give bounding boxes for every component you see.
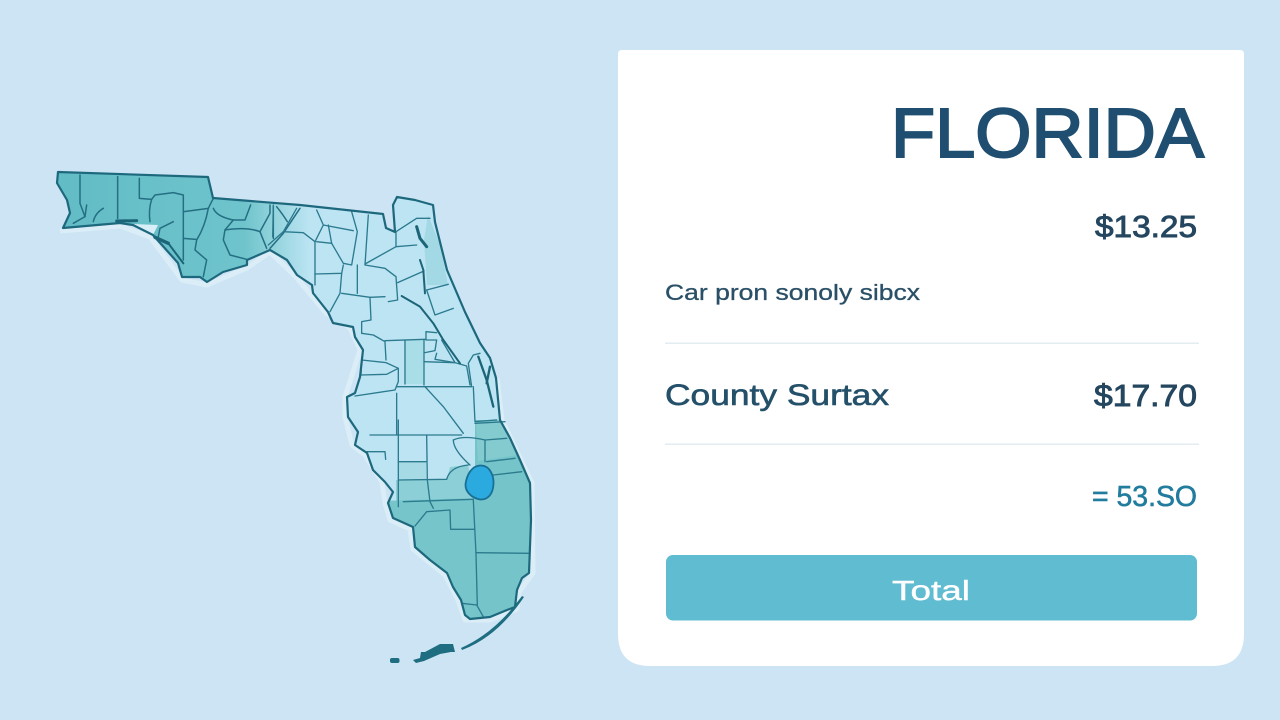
Florida Keys [390,596,524,663]
row 1 value: $13.25 [1095,209,1197,244]
South county lines [367,420,528,617]
state outline [57,172,531,619]
row 4 value: = 53.SO [1092,481,1197,513]
divider [665,342,1199,344]
row 3 label: County Surtax [665,379,889,412]
title: FLORIDA [891,94,1204,172]
Central county lines [268,205,497,435]
divider [665,444,1199,445]
row 2 label: Car pron sonoly sibcx [665,280,920,305]
card panel [618,50,1244,666]
Panhandle county lines [73,175,300,277]
coastal halo [60,226,533,620]
row 3 value: $17.70 [1094,378,1197,413]
Lake Okeechobee [465,465,494,500]
map of Florida [50,160,550,663]
total button: Total [892,575,970,606]
total button [666,555,1197,620]
map fill regions [58,173,530,618]
